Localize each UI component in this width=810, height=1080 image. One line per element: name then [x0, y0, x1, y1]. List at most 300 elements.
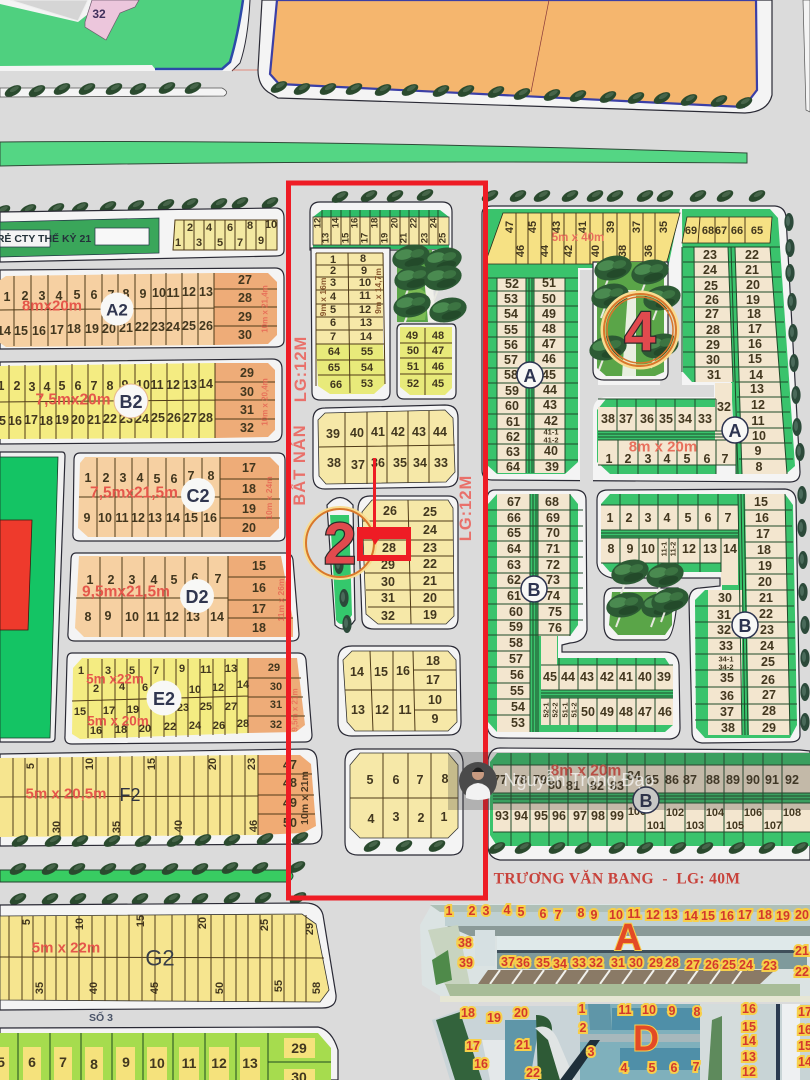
block B2: 7,5mx20m	[36, 392, 110, 408]
central block 12-25: 16	[350, 218, 360, 228]
block C2: 10m x 24m	[264, 476, 274, 520]
block E2: 19	[127, 704, 139, 716]
south strip lots 77-108: 87	[683, 773, 697, 787]
block D2: 15	[252, 559, 266, 573]
marker B south	[633, 787, 659, 813]
east block B-west curb and lots: 67	[507, 495, 521, 509]
block A2: 10	[152, 286, 166, 300]
south strip lots 77-108: 8m x 20m	[551, 762, 621, 780]
aerial rendering block D: 15	[742, 1020, 756, 1034]
east block B-west curb and lots: 60	[509, 605, 523, 619]
yellow lots 35-47: 36	[643, 245, 655, 257]
block E2: 6	[142, 682, 148, 694]
central lots 1-14 and 53-66: 12	[359, 304, 371, 316]
block F2: 23	[246, 758, 258, 770]
south strip lots 77-108	[487, 748, 810, 860]
east block B-west curb and lots: 76	[548, 621, 562, 635]
lots A east columns: 29	[706, 338, 720, 352]
yellow lots 35-47: 43	[551, 221, 563, 233]
tree park between B blocks	[604, 556, 691, 640]
block C2: 9	[84, 511, 91, 525]
block A2: 22	[135, 320, 149, 334]
east block B-west curb and lots: 43	[580, 670, 594, 684]
east block B-west curb and lots: 42	[600, 670, 614, 684]
central lots 9-18: 16	[396, 664, 410, 678]
bottom-left lime block: 12	[211, 1055, 227, 1071]
block C2: 18	[242, 482, 256, 496]
east block B-east curb and lots: 27	[762, 688, 776, 702]
south strip lots 77-108: 96	[552, 809, 566, 823]
road label SỐ 3: SỐ 3	[89, 1010, 113, 1024]
block E2: 14	[237, 679, 250, 691]
east block B-east curb and lots: 8	[608, 542, 615, 556]
south strip lots 77-108: 82	[590, 779, 604, 793]
yellow lots 35-47: 46	[515, 245, 527, 257]
central lots 1-14 and 53-66: 5	[330, 304, 336, 316]
lots A east columns: 27	[705, 307, 719, 321]
east block B-east curb and lots: 13	[703, 542, 717, 556]
lots 1-10 small block: 7	[237, 237, 243, 249]
block E2: 30	[270, 681, 282, 693]
road label BẤT NÁN LG:12M: LG:12M	[292, 336, 310, 402]
block D2: 11	[146, 610, 160, 624]
block D2: 10	[125, 610, 139, 624]
lots A west column 39-64: 53	[504, 292, 518, 306]
central lots 9-18	[338, 646, 461, 736]
south strip lots 77-108: 77	[493, 773, 507, 787]
block B2: 31	[240, 403, 254, 417]
watermark band with avatar and name: Nguyễn Trọng Đạo	[503, 769, 655, 790]
aerial rendering block D: 2	[580, 1021, 587, 1035]
yellow lots 35-47: 41	[577, 221, 589, 233]
block C2: 12	[131, 511, 145, 525]
south strip lots 77-108: 98	[591, 809, 605, 823]
block B2: 11	[150, 378, 164, 392]
east block B-west curb and lots: 73	[546, 573, 560, 587]
east block B-west curb and lots: 46	[658, 705, 672, 719]
block G2	[0, 903, 336, 1010]
aerial rendering block A: 39	[459, 956, 473, 970]
block B2: 16	[8, 414, 22, 428]
block A2: 13	[199, 285, 213, 299]
aerial rendering block A	[420, 903, 810, 1002]
east block B-west curb and lots: 69	[546, 511, 560, 525]
aerial rendering block A: 35	[536, 956, 550, 970]
aerial rendering block A: 22	[795, 965, 809, 979]
east block B-east curb and lots: 15	[754, 495, 768, 509]
central lots 19-32: 31	[381, 591, 395, 605]
aerial rendering block A: 23	[763, 959, 777, 973]
central lots 19-32: 20	[423, 591, 437, 605]
lots A east columns: 26	[705, 293, 719, 307]
aerial rendering block A: 20	[795, 908, 809, 922]
south strip lots 77-108: 106	[744, 807, 762, 819]
block D2: 14	[210, 610, 224, 624]
south strip lots 77-108: 85	[645, 773, 659, 787]
central lots 9-18: 9	[432, 712, 439, 726]
block A2: 25	[182, 319, 196, 333]
central lots 19-32	[358, 496, 458, 629]
central lots 45-52: 52	[407, 378, 419, 390]
aerial rendering block A: 24	[739, 958, 753, 972]
central lots 33-44: 40	[350, 426, 364, 440]
block A2: 5	[74, 288, 81, 302]
block A2: 24	[166, 320, 180, 334]
lots 1-10 small block: 2	[187, 222, 193, 234]
east block B-west curb and lots: 59	[509, 620, 523, 634]
block C2: 20	[242, 521, 256, 535]
aerial rendering block A: 1	[446, 904, 453, 918]
block C2: 16	[203, 511, 217, 525]
lots A east columns: 23	[703, 248, 717, 262]
central lots 1-14 and 53-66: 55	[361, 346, 373, 358]
south strip lots 77-108: 79	[533, 773, 547, 787]
block C2: 10	[98, 511, 112, 525]
east block B-east curb and lots: 32	[717, 623, 731, 637]
lots A south block 1-7 and 33-38: 2	[625, 452, 632, 466]
block C2: 8	[208, 469, 215, 483]
aerial rendering block D: 17	[466, 1039, 480, 1053]
aerial rendering block A: 4	[504, 903, 511, 917]
aerial rendering block A: 6	[540, 907, 547, 921]
lots A west column 39-64: 41-2	[543, 436, 559, 444]
east block B-east curb and lots: 20	[758, 575, 772, 589]
central lots 19-32: 24	[423, 523, 437, 537]
aerial rendering block D: 12	[742, 1065, 756, 1079]
block E2: 3	[105, 665, 111, 677]
right edge curb sliver	[803, 0, 810, 112]
central lots 1-8: 8	[442, 772, 449, 786]
orange central plot	[258, 0, 772, 113]
aerial rendering block A: 9	[591, 908, 598, 922]
yellow lots 65-69: 68	[702, 225, 714, 237]
central lots 1-8: 1	[441, 810, 448, 824]
block G2: 20	[197, 917, 209, 929]
east block B-west curb and lots: 52-2	[550, 702, 560, 718]
east block B-west curb and lots: 70	[546, 526, 560, 540]
east block B-west curb and lots: 48	[619, 705, 633, 719]
zone marker 2: 2	[324, 512, 356, 576]
block B2: 10m x 20,4m	[260, 378, 270, 426]
block G2: 45	[149, 982, 161, 994]
block D2: 1	[87, 573, 94, 587]
aerial rendering block A: 30	[629, 956, 643, 970]
block B2: 21	[87, 413, 101, 427]
block G2: 25	[259, 919, 271, 931]
central lots 19-32: 25	[423, 505, 437, 519]
red highlight on lot 28 with arrow	[357, 458, 411, 561]
block D2	[68, 553, 299, 641]
block A2: 20	[102, 322, 116, 336]
lots A south block 1-7 and 33-38: 38	[601, 412, 615, 426]
central lots 1-8: 3	[393, 810, 400, 824]
aerial rendering block A: 19	[776, 909, 790, 923]
company plot: RẺ CTY THẾ KỶ 21	[0, 208, 284, 262]
central lots 45-52: 47	[432, 345, 444, 357]
top green park with pink lot 32	[0, 0, 266, 71]
block E2: 16	[90, 725, 102, 737]
central block 12-25: 21	[398, 232, 410, 243]
central lots 19-32: 22	[423, 557, 437, 571]
lots A south block 1-7 and 33-38: 4	[664, 452, 671, 466]
south strip lots 77-108: 91	[765, 773, 779, 787]
aerial rendering block D: 7	[693, 1060, 700, 1074]
yellow lots 35-47: 35	[658, 221, 670, 233]
block C2: 15	[184, 511, 198, 525]
central lots 9-18: 12	[375, 703, 389, 717]
block A2: 27	[238, 273, 252, 287]
central tree park	[390, 241, 469, 332]
yellow lots 35-47: 39	[605, 221, 617, 233]
block D2: 17	[252, 602, 266, 616]
south strip lots 77-108: 83	[610, 779, 624, 793]
east block B-west curb and lots: 47	[638, 705, 652, 719]
lots A east columns: 32	[717, 400, 731, 414]
east block B-east curb and lots: 31	[717, 608, 731, 622]
bottom-left lime block: 9	[122, 1054, 130, 1070]
lots A east columns: 24	[703, 263, 717, 277]
block A2: 21	[119, 321, 133, 335]
lots A east columns: 28	[706, 323, 720, 337]
aerial rendering block D: 18	[461, 1006, 475, 1020]
block E2: E2	[153, 689, 175, 709]
aerial rendering block A: 17	[738, 908, 752, 922]
central lots 1-8: 5	[367, 773, 374, 787]
aerial rendering block A: 7	[555, 908, 562, 922]
east block B-east curb and lots: 5	[685, 511, 692, 525]
zone marker 2	[305, 508, 375, 578]
bottom-left lime block: 13	[242, 1055, 258, 1071]
lots A south block 1-7 and 33-38	[598, 399, 748, 474]
aerial rendering block A: 38	[458, 936, 472, 950]
long green median	[0, 141, 747, 166]
central lots 9-18: 17	[426, 673, 440, 687]
lots A east columns: 12	[751, 398, 765, 412]
lots A west column 39-64: 47	[542, 337, 556, 351]
block A2: 8mx20m	[22, 298, 82, 314]
lots A south block 1-7 and 33-38: 8m x 20m	[629, 438, 697, 456]
marker B west: B	[528, 580, 540, 600]
park 4 with trees	[587, 252, 683, 380]
block B2: 22	[103, 412, 117, 426]
marker A east: A	[728, 421, 742, 441]
block F2: 10m x 21m	[299, 771, 311, 825]
block B2: 3	[29, 380, 36, 394]
south strip lots 77-108: 101	[647, 820, 665, 832]
south strip lots 77-108: 102	[666, 807, 684, 819]
block B2: 13	[183, 378, 197, 392]
block B2: 26	[167, 411, 181, 425]
lots A west column 39-64: 42	[544, 414, 558, 428]
lots 1-10 small block: 3	[196, 237, 202, 249]
south strip lots 77-108: 89	[726, 773, 740, 787]
east block B-west curb and lots: 45	[543, 670, 557, 684]
block F2: 5m x 20,5m	[26, 786, 106, 802]
block E2: 32	[270, 719, 282, 731]
central block 12-25: 18	[370, 218, 380, 228]
south strip lots 77-108: 90	[746, 773, 760, 787]
east block B-west curb and lots: 50	[581, 705, 595, 719]
yellow lots 35-47: 47	[504, 221, 516, 233]
lots A west column 39-64	[487, 276, 578, 474]
east block B-east curb and lots: 24	[760, 639, 774, 653]
east block B-east curb and lots: 6	[705, 511, 712, 525]
red outline frame	[288, 183, 486, 898]
block B2: 12	[166, 378, 180, 392]
central lots 9-18: 13	[351, 703, 365, 717]
block E2: 23	[177, 702, 189, 714]
block D2: 11m x 26m	[276, 578, 286, 622]
block E2: 18	[115, 724, 127, 736]
east block B-west curb and lots: 39	[657, 670, 671, 684]
block C2: 4	[137, 471, 144, 485]
road label Trương Văn Bang: TRƯƠNG VĂN BANG - LG: 40M	[494, 870, 740, 888]
east block B-west curb and lots	[487, 490, 680, 739]
block E2: 2	[93, 683, 99, 695]
lots A west column 39-64: 45	[542, 368, 556, 382]
central lots 1-14 and 53-66: 10	[359, 277, 371, 289]
yellow lots 65-69	[682, 217, 772, 243]
block D2: 6	[192, 571, 199, 585]
east block B-west curb and lots: 68	[545, 495, 559, 509]
aerial rendering block D: 8	[694, 1005, 701, 1019]
east block B-west curb and lots: 58	[509, 636, 523, 650]
block B2: 7	[91, 379, 98, 393]
block A2: 1	[4, 290, 11, 304]
central lots 19-32: 29	[381, 558, 395, 572]
aerial rendering block D: 5	[649, 1061, 656, 1075]
east block B-west curb and lots: 74	[546, 589, 560, 603]
block E2: 10	[189, 684, 201, 696]
east block B-east curb and lots: 21	[759, 591, 773, 605]
block E2: 29	[268, 662, 280, 674]
lots A west column 39-64: 46	[542, 352, 556, 366]
lots A east columns: 18	[747, 307, 761, 321]
aerial rendering block A: 26	[705, 958, 719, 972]
lots A west column 39-64: 64	[506, 460, 520, 474]
central block 12-25: 15	[340, 232, 352, 243]
yellow lots 65-69: 67	[715, 225, 727, 237]
block C2: 14	[166, 511, 180, 525]
block B2: 5	[59, 379, 66, 393]
block A2: 18	[67, 322, 81, 336]
south strip lots 77-108: 105	[726, 820, 744, 832]
block F2: 30	[51, 821, 63, 833]
east block B-east curb and lots: 33	[719, 639, 733, 653]
aerial rendering block A: 37	[501, 955, 515, 969]
east tree line	[480, 188, 810, 731]
block B2	[0, 359, 282, 444]
block A2: 15	[14, 324, 28, 338]
south strip lots 77-108: 100	[628, 806, 646, 818]
block G2: 55	[273, 980, 285, 992]
aerial rendering block A: 8	[578, 906, 585, 920]
east block B-east curb and lots: 37	[720, 705, 734, 719]
lots A south block 1-7 and 33-38: 33	[698, 412, 712, 426]
block D2: 7	[215, 572, 222, 586]
block G2: 35	[34, 982, 46, 994]
central lots 19-32: 28	[382, 541, 396, 555]
aerial rendering block D: 10	[642, 1003, 656, 1017]
block D2: 8	[85, 610, 92, 624]
lots 1-10 small block: 4	[206, 222, 213, 234]
east block B-east curb and lots: 34-1	[718, 654, 734, 664]
aerial rendering block A: 12	[646, 908, 660, 922]
block A2: 10m x 21,4m	[260, 285, 270, 333]
block F2: F2	[119, 785, 141, 805]
east block B-east curb and lots: 18	[757, 543, 771, 557]
lots A south block 1-7 and 33-38: 1	[606, 452, 613, 466]
block G2: 29	[304, 923, 316, 935]
central lots 33-44	[313, 405, 458, 489]
east block B-west curb and lots: 62	[507, 573, 521, 587]
bottom-left lime block	[0, 1027, 338, 1080]
block E2: 15	[74, 706, 86, 718]
lots A west column 39-64: 52	[505, 277, 519, 291]
block C2: 11	[115, 511, 129, 525]
lots A west column 39-64: 44	[543, 383, 557, 397]
aerial rendering block A: 27	[686, 958, 700, 972]
road label BẤT NÁN LG:12M: BẤT NÁN	[290, 424, 309, 506]
east block B-west curb and lots: 71	[546, 542, 560, 556]
block A2: 16	[32, 324, 46, 338]
block D2: 12	[165, 610, 179, 624]
aerial rendering block A: A	[614, 917, 642, 959]
aerial rendering block D: 16	[474, 1057, 488, 1071]
block D2: 4	[151, 573, 158, 587]
yellow lots 35-47: 45	[527, 221, 539, 233]
lots A east columns: 19	[746, 293, 760, 307]
east block B-west curb and lots: 66	[507, 511, 521, 525]
block F2	[0, 749, 322, 849]
block D2: 9,5mx21,5m	[82, 584, 170, 600]
east block B-east curb and lots: 16	[755, 511, 769, 525]
central lots 1-14 and 53-66: 9m x 16m	[318, 277, 328, 316]
block G2: 50	[214, 982, 226, 994]
central lots 19-32: 19	[423, 608, 437, 622]
block A2: 8	[123, 287, 130, 301]
central lots 33-44: 35	[393, 456, 407, 470]
east block B-west curb and lots: 64	[507, 542, 521, 556]
block D2: 3	[129, 573, 136, 587]
east block B-east curb and lots: 11-1	[660, 542, 668, 556]
yellow lots 65-69: 69	[685, 225, 697, 237]
yellow lots 35-47	[487, 213, 680, 264]
yellow lots 35-47: 40	[590, 245, 602, 257]
block B2: 29	[240, 366, 254, 380]
yellow lots 35-47: 37	[631, 221, 643, 233]
block A2: 7	[108, 288, 115, 302]
aerial rendering block D: 11	[618, 1003, 632, 1017]
central lots 1-14 and 53-66: 2	[330, 265, 336, 277]
central lots 33-44: 41	[371, 425, 385, 439]
lots A south block 1-7 and 33-38: 5	[684, 452, 691, 466]
zone marker 4	[603, 293, 677, 367]
east block B-east curb and lots: 38	[721, 721, 735, 735]
block E2: 24	[189, 720, 202, 732]
block E2: 11	[200, 664, 212, 676]
block E2: 5m x 20m	[87, 714, 149, 728]
lots A west column 39-64: 55	[504, 323, 518, 337]
block E2	[65, 653, 312, 744]
block B2: 23	[119, 412, 133, 426]
aerial rendering block A: 29	[649, 956, 663, 970]
central lots 1-14 and 53-66: 9	[361, 265, 367, 277]
east block B-west curb and lots: 44	[561, 670, 575, 684]
central block 12-25: 14	[330, 217, 342, 228]
central lots 33-44: 38	[327, 456, 341, 470]
aerial rendering block D: D	[633, 1018, 659, 1058]
